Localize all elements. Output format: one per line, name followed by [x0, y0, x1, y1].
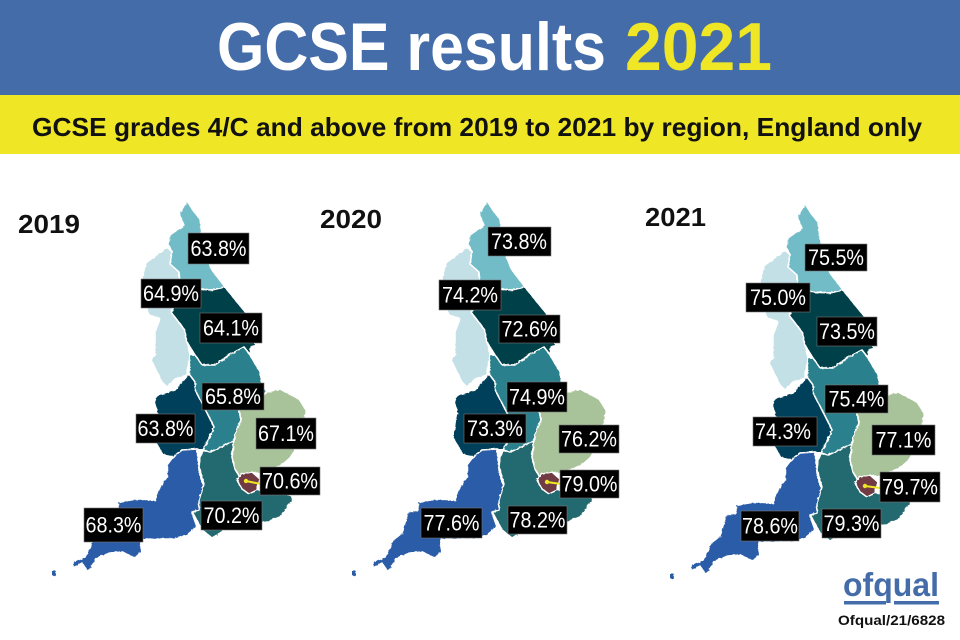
panel: 2020 map [320, 201, 619, 576]
value labels 2020: 72.6% [502, 316, 558, 342]
value labels 2021: 73.5% [819, 319, 875, 344]
title banner [0, 0, 960, 95]
value labels 2020: 76.2% [561, 426, 617, 452]
value labels 2019: 65.8% [205, 384, 261, 409]
panel: 2019 map [18, 201, 320, 576]
London marker 2021 [863, 484, 880, 488]
Ofqual logo: ofqual [843, 566, 939, 603]
title year: 2021 [625, 9, 772, 85]
value labels 2019 [84, 233, 320, 542]
value labels 2019: 64.1% [203, 316, 259, 340]
value labels 2019: 70.2% [204, 503, 260, 528]
year heading 2019: 2019 [18, 209, 80, 239]
value labels 2021: 77.1% [876, 428, 932, 452]
value labels 2021: 79.3% [824, 511, 880, 536]
title text: GCSE results [217, 9, 606, 85]
value labels 2021: 78.6% [742, 514, 798, 538]
value labels 2020: 77.6% [424, 510, 480, 536]
subtitle banner [0, 95, 960, 154]
value labels 2020: 74.9% [509, 384, 565, 410]
map of England regions 2021 [670, 204, 924, 579]
value labels 2020 [421, 227, 619, 538]
value labels 2019: 64.9% [143, 281, 199, 306]
year heading 2020: 2020 [320, 204, 382, 234]
London marker 2020 [545, 480, 561, 484]
value labels 2019: 63.8% [190, 236, 246, 261]
value labels 2021: 75.0% [750, 285, 806, 310]
map of England regions 2019 [52, 201, 306, 576]
value labels 2020: 74.2% [442, 282, 498, 308]
value labels 2021: 74.3% [755, 419, 811, 444]
value labels 2019: 63.8% [138, 416, 194, 441]
panel: 2021 map [645, 202, 940, 579]
value labels 2019: 67.1% [258, 421, 314, 446]
value labels 2020: 73.8% [491, 229, 547, 254]
subtitle text: GCSE grades 4/C and above from 2019 to 2021 by region, England only [32, 112, 923, 142]
value labels 2020: 78.2% [510, 508, 566, 532]
value labels 2021: 79.7% [882, 474, 938, 500]
value labels 2020: 73.3% [467, 416, 523, 441]
value labels 2021: 75.4% [828, 386, 884, 412]
year heading 2021: 2021 [645, 202, 706, 232]
reference code: Ofqual/21/6828 [838, 612, 945, 628]
value labels 2021: 75.5% [808, 245, 864, 270]
value labels 2021 [741, 244, 940, 541]
map of England regions 2020 [352, 201, 606, 576]
value labels 2019: 70.6% [262, 468, 318, 494]
value labels 2020: 79.0% [562, 472, 618, 496]
London marker 2019 [244, 479, 261, 484]
value labels 2019: 68.3% [86, 512, 142, 538]
